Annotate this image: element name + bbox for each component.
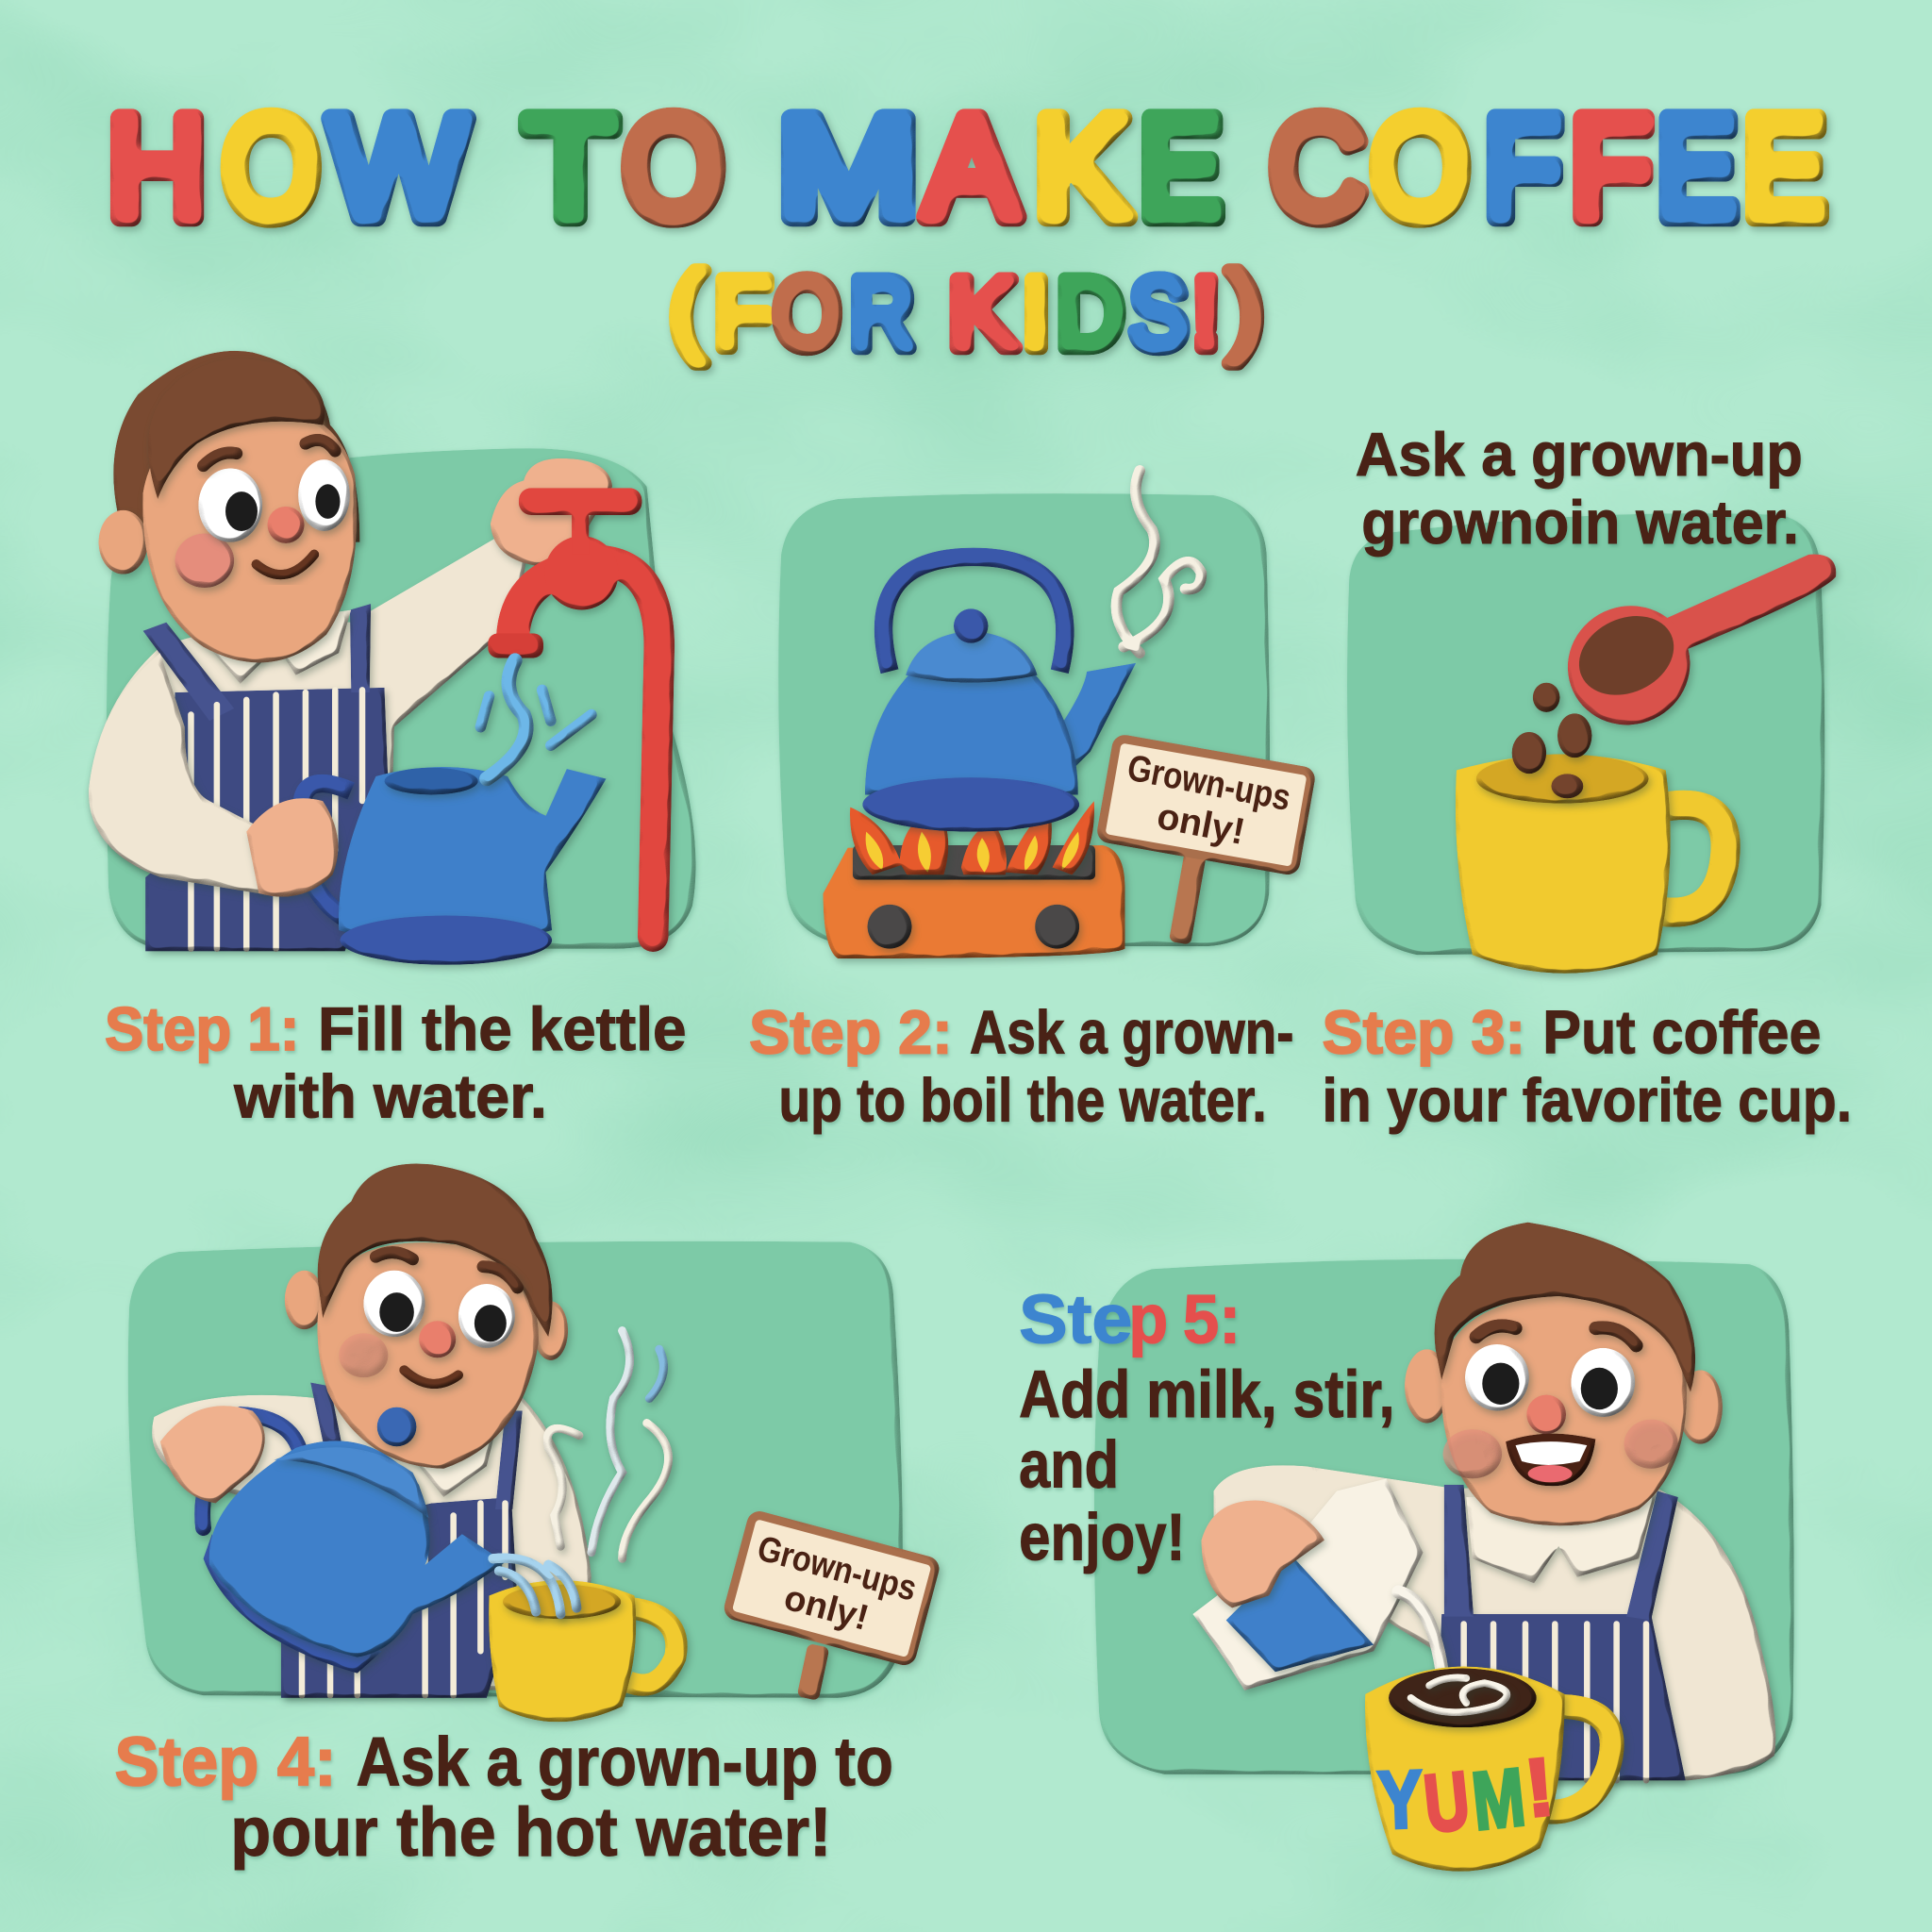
red scoop: [1548, 555, 1836, 745]
title line: HOW TO MAKE COFFEE: W: [330, 89, 467, 248]
eyebrows: [204, 440, 335, 466]
caption: step 5: [1019, 1282, 1395, 1574]
title line: HOW TO MAKE COFFEE: K: [1035, 89, 1130, 248]
coffee beans: [1512, 683, 1592, 798]
shirt and arms: [1214, 1465, 1775, 1780]
caption: step 4: Step 4:: [114, 1724, 337, 1801]
illustration: step 2 kettle on stove: [823, 471, 1201, 958]
title line: HOW TO MAKE COFFEE: F: [1485, 89, 1561, 248]
poured water: [492, 1558, 576, 1614]
milk swirl: [1411, 1677, 1507, 1712]
carton blue band: [1226, 1555, 1374, 1672]
step 5 body text: [1019, 1357, 1395, 1574]
milk carton: [1192, 1478, 1424, 1690]
sleeve over apron: [89, 653, 281, 894]
title line: HOW TO MAKE COFFEE: F: [1571, 89, 1651, 248]
title line: (FOR KIDS!): S: [1130, 258, 1188, 369]
open mouth: [1506, 1434, 1595, 1486]
step 5 heading: 5:: [1183, 1282, 1241, 1358]
illustration: step 5 man adding milk: [1192, 1223, 1775, 1872]
illustration: step 1 man filling kettle at the tap: [89, 351, 659, 965]
title line: (FOR KIDS!): R: [850, 258, 914, 369]
cheek: [175, 534, 234, 588]
kettle lid: [906, 631, 1038, 683]
mug lettering: YUM!: U: [1420, 1756, 1474, 1850]
mug handle: [1663, 805, 1725, 912]
step 5 heading: Ste: [1019, 1282, 1132, 1358]
eyes and face: [339, 1253, 518, 1384]
hair front: [148, 358, 325, 499]
kettle handle: [203, 1414, 302, 1528]
kettle body: [865, 672, 1078, 794]
title line: HOW TO MAKE COFFEE: E: [1140, 89, 1223, 248]
mug handle: [628, 1607, 676, 1685]
flames: [850, 801, 1094, 874]
ear: [98, 510, 148, 575]
sign: grown-ups only (step 2): only!: [1154, 796, 1248, 853]
hair: [1435, 1223, 1695, 1392]
sign: grown-ups only (step 4): only!: [780, 1578, 873, 1639]
yellow mug: [1365, 1667, 1565, 1872]
title line: HOW TO MAKE COFFEE: [108, 89, 1826, 248]
red tap: [488, 488, 659, 937]
mug opening: [503, 1585, 621, 1619]
title line: HOW TO MAKE COFFEE: M: [778, 89, 918, 248]
caption: step 4: Ask a grown-up to: [356, 1724, 893, 1801]
title line: (FOR KIDS!): ): [1228, 254, 1263, 364]
sign: grown-ups only (step 4): [726, 1514, 937, 1701]
panel: step 5 backdrop: [1094, 1259, 1794, 1774]
illustration: step 4 man pouring hot water: [152, 1163, 676, 1722]
milk stream: [1398, 1592, 1444, 1688]
blue kettle: [339, 767, 607, 945]
step 5 body text: and: [1019, 1426, 1119, 1501]
step 5 heading: p: [1128, 1282, 1168, 1358]
hand on kettle: [246, 798, 339, 897]
hand: [160, 1406, 265, 1503]
yellow mug: [1456, 755, 1671, 974]
stove grate: [853, 845, 1095, 880]
mug lettering: YUM!: [1371, 1738, 1558, 1857]
yellow mug: [489, 1580, 636, 1722]
hair back: [113, 351, 359, 555]
mug lettering: YUM!: M: [1468, 1752, 1529, 1847]
title line: (FOR KIDS!): O: [774, 258, 841, 369]
mug lettering: YUM!: !: [1522, 1741, 1557, 1835]
text: ask a grown-up caption: grownoin water.: [1361, 488, 1799, 557]
panel: step 4 backdrop: [128, 1241, 903, 1698]
kettle knob: [377, 1407, 416, 1446]
caption: step 1: Step 1:: [105, 994, 299, 1063]
title line: HOW TO MAKE COFFEE: O: [1372, 89, 1469, 248]
title line: (FOR KIDS!): I: [1023, 258, 1050, 369]
kettle handle: [884, 557, 1065, 672]
mug opening: [1476, 754, 1649, 804]
ears: [1405, 1349, 1723, 1444]
caption: step 3: in your favorite cup.: [1322, 1066, 1852, 1135]
step 5 body text: Add milk, stir,: [1019, 1357, 1395, 1431]
caption: step 3: Put coffee: [1542, 998, 1821, 1067]
step 5 body text: enjoy!: [1019, 1500, 1185, 1574]
title line: (FOR KIDS!): (: [671, 254, 705, 364]
head: [1441, 1293, 1687, 1525]
kettle knob: [954, 608, 989, 643]
caption: step 1: Fill the kettle: [318, 994, 687, 1063]
caption: step 4: [114, 1724, 893, 1871]
kettle spout: [1059, 663, 1136, 770]
eyes and face: [1442, 1326, 1678, 1478]
illustration: step 3 spoon, beans and yellow mug: [1456, 555, 1836, 974]
caption: step 2: Step 2:: [749, 998, 953, 1067]
title line: (FOR KIDS!): [671, 254, 1263, 369]
shirt and arm: [152, 1392, 591, 1695]
title line: HOW TO MAKE COFFEE: E: [1743, 89, 1826, 248]
title line: (FOR KIDS!): F: [715, 258, 772, 369]
striped apron: [1436, 1485, 1686, 1780]
stove: [823, 845, 1124, 958]
head: [142, 404, 357, 663]
coffee surface: [1389, 1668, 1537, 1727]
caption: step 2: up to boil the water.: [778, 1066, 1267, 1135]
shirt and arms: [89, 536, 530, 912]
caption: step 2: [749, 998, 1293, 1135]
kettle base: [862, 777, 1079, 832]
mug lettering: YUM!: Y: [1376, 1754, 1424, 1846]
title line: HOW TO MAKE COFFEE: E: [1657, 89, 1738, 248]
striped apron: [143, 604, 390, 951]
ears: [285, 1271, 568, 1360]
title line: HOW TO MAKE COFFEE: O: [223, 89, 319, 248]
caption: step 3: [1322, 998, 1852, 1135]
panel: step 2 backdrop: [778, 493, 1270, 946]
caption: step 2: Ask a grown-: [970, 998, 1293, 1067]
collar: [375, 1417, 499, 1497]
step 5 heading: [1019, 1282, 1241, 1358]
panel: step 3 backdrop: [1347, 513, 1824, 955]
sign: grown-ups only (step 4): Grown-ups: [753, 1529, 921, 1609]
title line: (FOR KIDS!): K: [949, 258, 1017, 369]
striped apron: [281, 1382, 523, 1698]
title line: HOW TO MAKE COFFEE: O: [624, 89, 724, 248]
title line: (FOR KIDS!): !: [1192, 258, 1220, 369]
head: [317, 1242, 539, 1469]
caption: step 3: Step 3:: [1322, 998, 1525, 1067]
kettle opening: [385, 768, 478, 794]
hand on tap: [491, 458, 612, 567]
water: [480, 660, 591, 778]
collar: [204, 610, 351, 684]
hand: [1201, 1501, 1324, 1607]
sign: grown-ups only (step 2): Grown-ups: [1124, 748, 1294, 819]
panel: step 1 backdrop: [107, 448, 696, 949]
steam: [547, 1331, 669, 1558]
nose: [267, 507, 305, 543]
stove knobs: [868, 905, 1079, 949]
title line: HOW TO MAKE COFFEE: A: [925, 89, 1018, 248]
eyes: [198, 459, 350, 542]
kettle lid: [274, 1447, 429, 1518]
title line: HOW TO MAKE COFFEE: H: [108, 89, 206, 248]
kettle body: [209, 1441, 506, 1657]
mug handle: [1541, 1707, 1612, 1812]
title line: HOW TO MAKE COFFEE: T: [525, 89, 616, 248]
collar: [1466, 1491, 1657, 1583]
kettle handle: [301, 783, 351, 918]
title line: HOW TO MAKE COFFEE: C: [1271, 89, 1365, 248]
steam: [1116, 471, 1201, 653]
mouth: [257, 555, 314, 575]
hair: [318, 1163, 553, 1337]
title: [108, 89, 1826, 369]
caption: step 1: with water.: [233, 1062, 547, 1131]
caption: step 1: [105, 994, 687, 1131]
text: ask a grown-up caption: Ask a grown-up: [1356, 420, 1803, 489]
text: ask a grown-up caption: [1356, 420, 1803, 557]
kettle base: [340, 915, 552, 965]
kettle base: [204, 1534, 382, 1674]
title line: (FOR KIDS!): D: [1058, 258, 1124, 369]
caption: step 4: pour the hot water!: [230, 1794, 832, 1871]
sign: grown-ups only (step 2): [1100, 738, 1312, 945]
